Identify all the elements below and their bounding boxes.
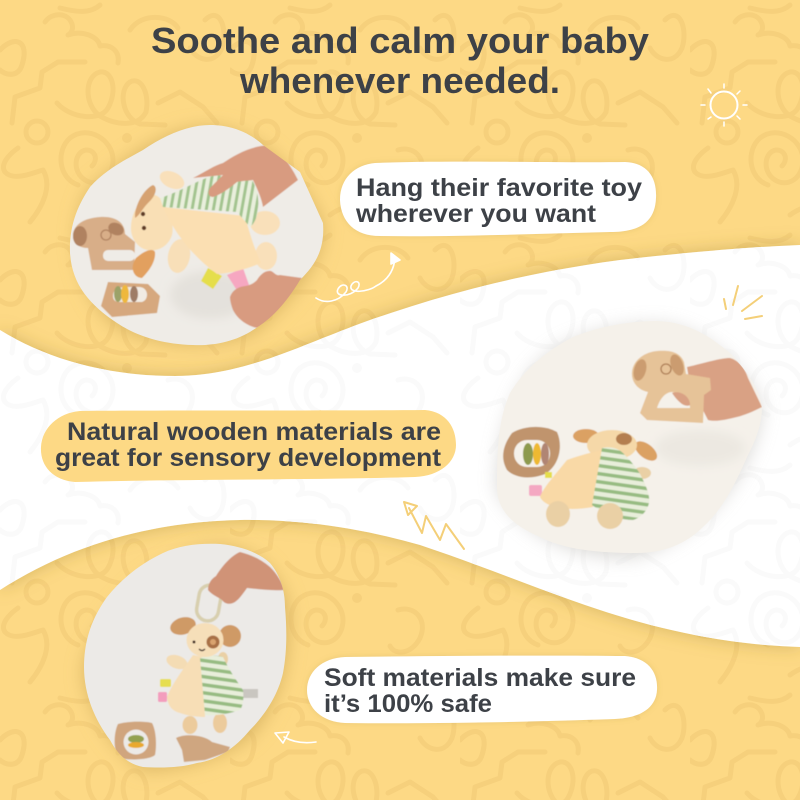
title: whenever needed. (239, 60, 560, 101)
plush tags (201, 268, 222, 289)
photo 2: wooden toy held by hand (490, 315, 770, 560)
plush striped blanket (160, 175, 258, 227)
hand (208, 552, 284, 604)
white wavy band (0, 245, 800, 647)
plush head (587, 430, 637, 460)
wooden teether (176, 735, 230, 762)
plush cream blanket (163, 207, 261, 274)
plush legs (167, 238, 191, 274)
wooden dog teether (632, 351, 711, 423)
plush tags (529, 485, 542, 496)
plush arms (166, 654, 188, 670)
arrow: white looping (316, 253, 400, 301)
plush small foot (633, 467, 651, 479)
title: Soothe and calm your baby (151, 20, 649, 61)
plush tags (160, 679, 171, 687)
wooden rattle (101, 282, 160, 317)
decorative yellow rays (724, 286, 762, 319)
photo 2 image (498, 322, 762, 553)
plush feet (546, 501, 570, 527)
plush body cream (167, 655, 205, 717)
callout 2: great for sensory development (55, 444, 442, 472)
plush body striped (200, 656, 243, 715)
lower hand (230, 271, 302, 328)
plush head (186, 623, 224, 657)
callout 3: it’s 100% safe (324, 690, 492, 718)
plush feet (182, 716, 198, 734)
wooden rattle (115, 722, 156, 759)
hanging ring (195, 583, 223, 623)
callout 2: Natural wooden materials are (67, 418, 441, 446)
callout 2 (41, 410, 456, 482)
icon: sun (701, 84, 747, 126)
plush ears (573, 429, 599, 443)
photo 3 image (78, 540, 293, 772)
callout 3 (307, 656, 657, 723)
callout 3: Soft materials make sure (324, 664, 636, 692)
photo 2 shadow (497, 325, 762, 557)
callout 1 (340, 162, 656, 236)
photo 1: plush toy held by hands (60, 120, 330, 350)
arrow: white curved left (275, 732, 316, 743)
photo 3 shadow (84, 547, 288, 770)
callout 1: Hang their favorite toy (356, 174, 642, 202)
wooden teether (73, 217, 135, 270)
photo 1 shadow (77, 128, 323, 344)
photo 1 image (60, 120, 330, 350)
plush cream blanket (540, 450, 602, 509)
arrow: yellow zigzag (404, 502, 464, 549)
photo 3: plush toy hanging (78, 540, 293, 772)
plush ears (170, 616, 196, 636)
wooden rattle (503, 427, 560, 477)
plush head (131, 195, 173, 250)
upper hand (193, 145, 298, 207)
plush striped blanket (592, 447, 649, 520)
hand (687, 358, 762, 421)
callout 1: wherever you want (355, 200, 597, 228)
title (151, 20, 649, 101)
